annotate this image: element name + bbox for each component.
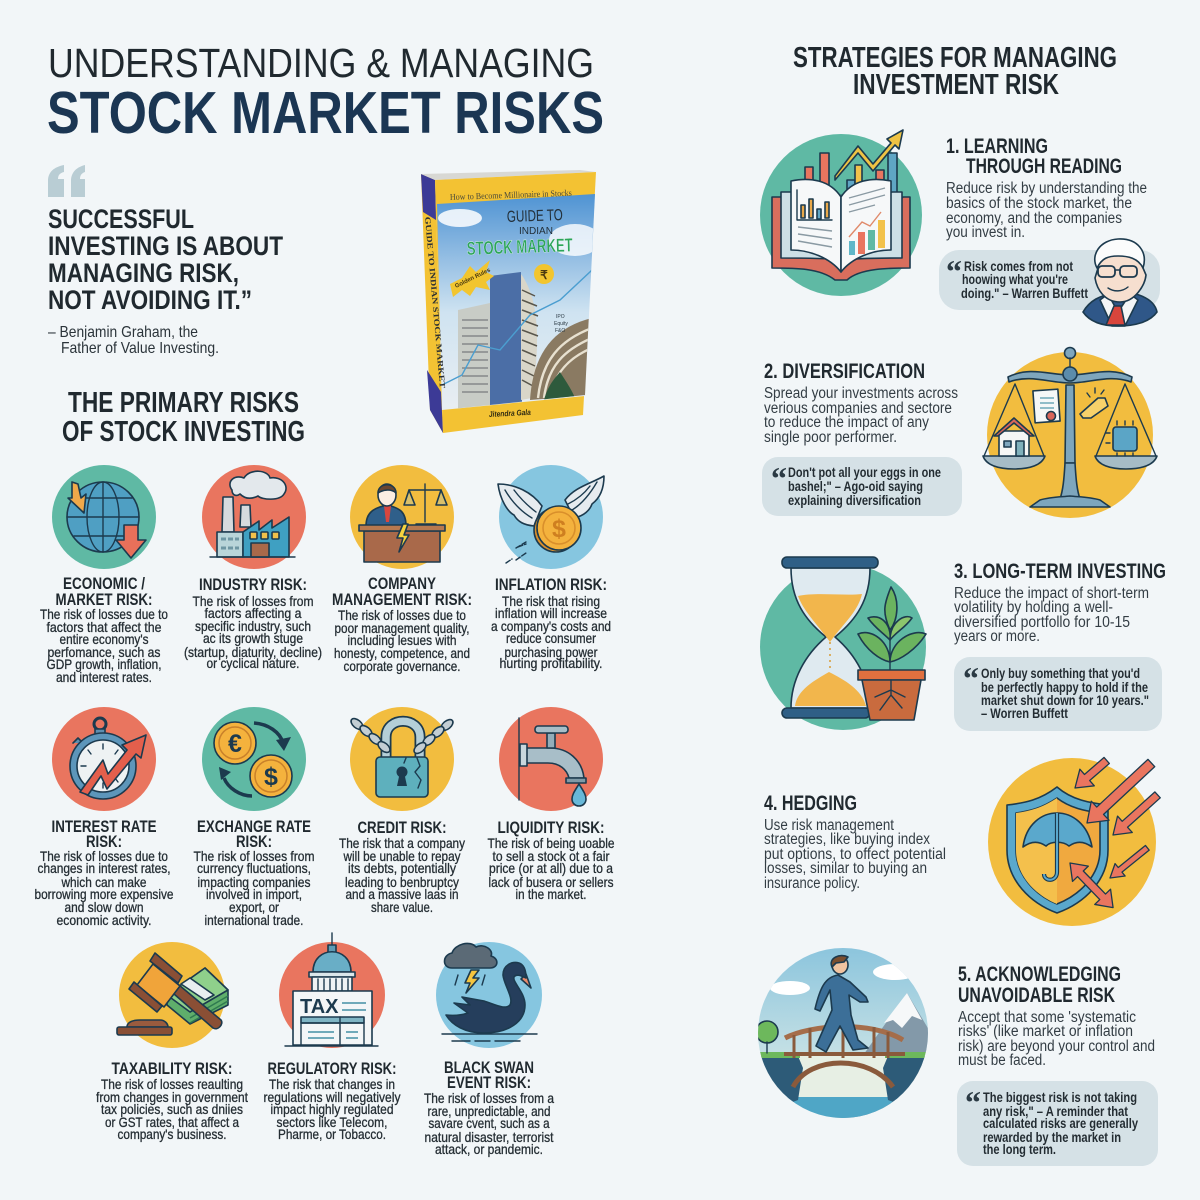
icon: Warren Buffett portrait: [1083, 239, 1157, 326]
callout: proverb: explaining diversification: [788, 492, 921, 508]
description: and slow down: [64, 899, 144, 915]
icon: stopwatch with rising arrow: [70, 718, 146, 799]
icon: black swan under storm cloud: [442, 943, 537, 1041]
icon: currency exchange coins: €: [228, 730, 242, 758]
description: Accept that some 'systematic: [958, 1009, 1136, 1026]
title: UNDERSTANDING & MANAGING: [48, 40, 594, 86]
heading: EXCHANGE RATE: [197, 817, 311, 836]
description: which can make: [61, 874, 147, 890]
icon: winged coin: $: [552, 515, 566, 543]
panel: black swan event risk: EVENT RISK:: [447, 1073, 531, 1092]
description: The risk of losses from: [194, 848, 314, 864]
panel: strategy 3 long-term investing: [760, 557, 1166, 731]
heading: REGULATORY RISK:: [268, 1059, 396, 1078]
description: verious companies and sectore: [764, 400, 952, 417]
quote text: [48, 204, 283, 315]
callout: proverb: [762, 457, 962, 516]
panel: strategy 4 hedging: [764, 752, 1165, 926]
description: risk) are beyond your control and: [958, 1038, 1155, 1055]
description: volatility by holding a well-: [954, 599, 1113, 616]
quote text: MANAGING RISK,: [48, 258, 239, 288]
description: rare, unpredictable, and: [428, 1103, 550, 1119]
description: (startup, diaturity, decline): [184, 644, 322, 660]
description: [946, 180, 1147, 241]
callout: Buffett quote: Risk comes from not: [964, 258, 1073, 274]
title: STOCK MARKET RISKS: [47, 80, 604, 146]
description: you invest in.: [946, 224, 1025, 241]
description: a company's costs and: [491, 618, 611, 634]
description: GDP growth, inflation,: [46, 656, 162, 672]
description: specific industry, such: [195, 618, 311, 634]
description: [264, 1076, 400, 1142]
description: [954, 585, 1149, 645]
description: [334, 607, 470, 674]
panel: industry risk: [184, 465, 322, 671]
panel: company management risk: [332, 465, 472, 674]
icon: gavel and cash: [117, 953, 228, 1035]
description: [34, 848, 174, 928]
description: purchasing power: [504, 644, 598, 660]
heading: primary risks: [62, 387, 305, 448]
callout: Buffett quote: market shut down for 10 years.": [981, 692, 1149, 708]
description: leading to benbruptcy: [345, 874, 459, 890]
callout: Buffett quote: [954, 657, 1162, 731]
description: regulations will negatively: [264, 1089, 400, 1105]
description: Reduce the impact of short-term: [954, 585, 1149, 602]
description: changes in interest rates,: [38, 860, 170, 876]
description: its debts, potentially: [348, 860, 456, 876]
panel: interest rate risk: [34, 707, 174, 928]
description: economic activity.: [56, 912, 152, 928]
description: must be faced.: [958, 1052, 1046, 1069]
description: factors that affect the: [46, 619, 162, 635]
heading: primary risks: THE PRIMARY RISKS: [68, 387, 299, 419]
description: The risk of losses from a: [424, 1090, 554, 1106]
callout: biggest risk quote: the long term.: [983, 1141, 1056, 1157]
quote text: NOT AVOIDING IT.”: [48, 285, 252, 315]
quote text: INVESTING IS ABOUT: [48, 231, 283, 261]
quote text: SUCCESSFUL: [48, 204, 194, 234]
callout: proverb: Don't pot all your eggs in one: [788, 464, 941, 480]
description: put options, to offect potential: [764, 846, 946, 863]
description: and interest rates.: [56, 669, 152, 685]
description: [40, 606, 168, 685]
heading: 4. HEDGING: [764, 792, 857, 815]
description: [764, 817, 946, 892]
heading: 2. DIVERSIFICATION: [764, 360, 925, 383]
description: economy, and the companies: [946, 210, 1122, 227]
heading: [946, 135, 1122, 178]
description: share value.: [371, 899, 433, 915]
book cover: Jitendra Gala: [489, 408, 532, 419]
heading: LIQUIDITY RISK:: [498, 818, 604, 837]
description: company's business.: [118, 1126, 226, 1142]
description: sectors like Telecom,: [276, 1114, 388, 1130]
callout: Buffett quote: [939, 250, 1160, 310]
icon: chained padlock: [349, 716, 455, 797]
heading: INFLATION RISK:: [495, 575, 607, 594]
panel: exchange rate risk: [194, 707, 314, 928]
heading: INDUSTRY RISK:: [199, 575, 307, 594]
description: The risk that changes in: [269, 1076, 395, 1092]
description: impacting companies: [198, 874, 310, 890]
panel: black swan event risk: [424, 942, 554, 1157]
callout: Buffett quote: Only buy something that you'd: [981, 665, 1140, 681]
heading: 1. LEARNING: [946, 135, 1048, 158]
icon: executive at cracked desk: [359, 484, 447, 562]
book cover: INDIAN: [519, 226, 553, 237]
description: The risk of losses due to: [40, 848, 168, 864]
description: attack, or pandemic.: [435, 1141, 543, 1157]
description: basics of the stock market, the: [946, 195, 1132, 212]
panel: strategy 5 acknowledging unavoidable risk: [756, 948, 1158, 1166]
description: diversified portfollo for 10-15: [954, 614, 1130, 631]
description: [764, 385, 958, 446]
panel: credit risk: [339, 707, 465, 915]
icon: currency exchange coins: $: [264, 763, 278, 791]
quote panel: [48, 165, 283, 357]
description: hurting profitability.: [500, 655, 602, 671]
icon: currency exchange coins: [214, 722, 292, 797]
icon: globe: [67, 482, 146, 558]
callout: biggest risk quote: The biggest risk is not taking: [983, 1089, 1137, 1105]
icon: shield with umbrella and arrows: [988, 752, 1165, 926]
panel: economic market risk: MARKET RISK:: [56, 590, 152, 609]
description: in the market.: [516, 886, 586, 902]
callout: biggest risk quote: [957, 1081, 1158, 1166]
callout: Buffett quote: hoowing what you're: [962, 271, 1068, 287]
description: losses, similar to buying an: [764, 860, 927, 877]
description: [339, 835, 465, 915]
description: involved in import,: [206, 886, 302, 902]
description: The risk of losses due to: [40, 606, 168, 622]
description: impact highly regulated: [270, 1101, 394, 1117]
description: will be unable to repay: [343, 848, 460, 864]
book cover: GUIDE TO INDIAN STOCK MARKET: [423, 216, 447, 389]
description: price (or at all) due to a: [489, 860, 613, 876]
heading: UNAVOIDABLE RISK: [958, 984, 1115, 1007]
description: lack of busera or sellers: [488, 874, 614, 890]
description: factors affecting a: [204, 605, 302, 621]
description: [958, 1009, 1155, 1069]
callout: proverb: “: [771, 460, 787, 496]
description: The risk of losses due to: [338, 607, 466, 623]
panel: strategy 2 diversification: [762, 348, 1157, 518]
description: [424, 1090, 554, 1157]
description: or GST rates, that affect a: [105, 1114, 239, 1130]
heading: primary risks: OF STOCK INVESTING: [62, 416, 305, 448]
heading: INTEREST RATE: [52, 817, 156, 836]
panel: interest rate risk: RISK:: [86, 832, 122, 851]
icon: capitol with tax form: [285, 933, 378, 1046]
icon: factory: [210, 471, 295, 557]
description: to sell a stock ot a fair: [492, 848, 610, 864]
callout: biggest risk quote: rewarded by the market in: [983, 1129, 1121, 1145]
callout: proverb: bashel;" – Ago-oid saying: [788, 478, 923, 494]
description: [184, 593, 322, 671]
panel: liquidity risk: [488, 707, 615, 902]
description: reduce consumer: [506, 630, 596, 646]
description: corporate governance.: [344, 658, 460, 674]
attribution: Father of Value Investing.: [61, 340, 219, 357]
attribution: [48, 324, 219, 357]
description: tax policies, such as dniies: [101, 1101, 243, 1117]
book cover: How to Become Millionaire in Stocks: [450, 188, 572, 202]
panel: inflation risk: [491, 465, 611, 671]
description: Spread your investments across: [764, 385, 958, 402]
panel: economic market risk: [40, 465, 168, 685]
panel: taxability risk: [96, 942, 248, 1142]
heading: strategies: [793, 42, 1117, 101]
panel: company management risk: MANAGEMENT RISK:: [332, 590, 472, 609]
description: export, or: [229, 899, 279, 915]
heading: CREDIT RISK:: [358, 818, 446, 837]
description: poor management quality,: [334, 620, 470, 636]
description: The risk of losses from: [192, 593, 314, 609]
heading: ECONOMIC /: [63, 574, 145, 593]
icon: open book with charts: [760, 130, 922, 296]
callout: Buffett quote: “: [963, 660, 979, 696]
callout: biggest risk quote: “: [965, 1084, 981, 1120]
book cover: ₹: [540, 268, 548, 282]
callout: biggest risk quote: any risk," – A reminder that: [983, 1103, 1128, 1119]
panel: regulatory risk: [264, 933, 400, 1142]
attribution: – Benjamin Graham, the: [48, 324, 198, 341]
book cover: Golden Rules: [454, 267, 492, 290]
book cover: F&O: [555, 328, 565, 334]
description: natural disaster, terrorist: [424, 1129, 554, 1145]
book cover: [421, 170, 601, 433]
description: inflation will increase: [495, 605, 607, 621]
description: borrowing more expensive: [34, 886, 174, 902]
callout: Buffett quote: doing." – Warren Buffett: [961, 285, 1088, 301]
description: insurance policy.: [764, 875, 860, 892]
book cover: STOCK MARKET: [466, 235, 573, 260]
description: [96, 1076, 248, 1142]
book cover: IPO: [556, 314, 565, 320]
heading: [958, 963, 1121, 1007]
description: Reduce risk by understanding the: [946, 180, 1147, 197]
book cover: Equity: [554, 321, 568, 327]
description: currency fluctuations,: [197, 860, 311, 876]
callout: Buffett quote: “: [946, 253, 962, 289]
description: and a massive laas in: [346, 886, 458, 902]
description: Pharme, or Tobacco.: [278, 1126, 386, 1142]
heading: TAXABILITY RISK:: [112, 1059, 232, 1078]
icon: winged coin: [498, 476, 604, 563]
description: risks' (like market or inflation: [958, 1023, 1133, 1040]
heading: BLACK SWAN: [444, 1058, 534, 1077]
heading: THROUGH READING: [966, 155, 1122, 178]
icon: balance scale with assets: [983, 348, 1157, 518]
description: international trade.: [204, 912, 304, 928]
description: [488, 835, 615, 902]
description: The risk that a company: [339, 835, 465, 851]
description: The risk of losses reaulting: [101, 1076, 243, 1092]
heading: COMPANY: [368, 574, 437, 593]
description: perfomance, such as: [48, 644, 160, 660]
icon: quotation mark: [48, 165, 85, 197]
description: entire economy's: [60, 631, 148, 647]
description: [194, 848, 314, 928]
description: Use risk management: [764, 817, 895, 834]
icon: hourglass and plant: [760, 557, 926, 730]
description: including lesues with: [348, 632, 456, 648]
description: savare cvent, such as a: [428, 1115, 550, 1131]
callout: Buffett quote: be perfectly happy to hold if the: [981, 679, 1148, 695]
description: honesty, competence, and: [334, 645, 470, 661]
description: single poor performer.: [764, 429, 897, 446]
callout: biggest risk quote: calculated risks are generally: [983, 1115, 1138, 1131]
icon: dripping tap: [519, 718, 586, 806]
description: or cyclical nature.: [206, 655, 300, 671]
title: [47, 40, 604, 146]
panel: exchange rate risk: RISK:: [236, 832, 272, 851]
callout: Buffett quote: – Worren Buffett: [981, 705, 1068, 721]
heading: 5. ACKNOWLEDGING: [958, 963, 1121, 986]
book cover: GUIDE TO: [507, 207, 563, 226]
panel: strategy 1 learning through reading: [760, 130, 1160, 326]
icon: person crossing bridge: [756, 948, 935, 1121]
description: from changes in government: [96, 1089, 248, 1105]
heading: strategies: INVESTMENT RISK: [853, 69, 1059, 101]
description: [491, 593, 611, 671]
description: ac its growth stuge: [203, 630, 303, 646]
description: The risk that rising: [502, 593, 600, 609]
icon: capitol with tax form: TAX: [300, 996, 339, 1018]
description: years or more.: [954, 628, 1040, 645]
description: to reduce the impact of any: [764, 414, 929, 431]
description: The risk of being uoable: [488, 835, 615, 851]
description: strategies, like buying index: [764, 831, 930, 848]
